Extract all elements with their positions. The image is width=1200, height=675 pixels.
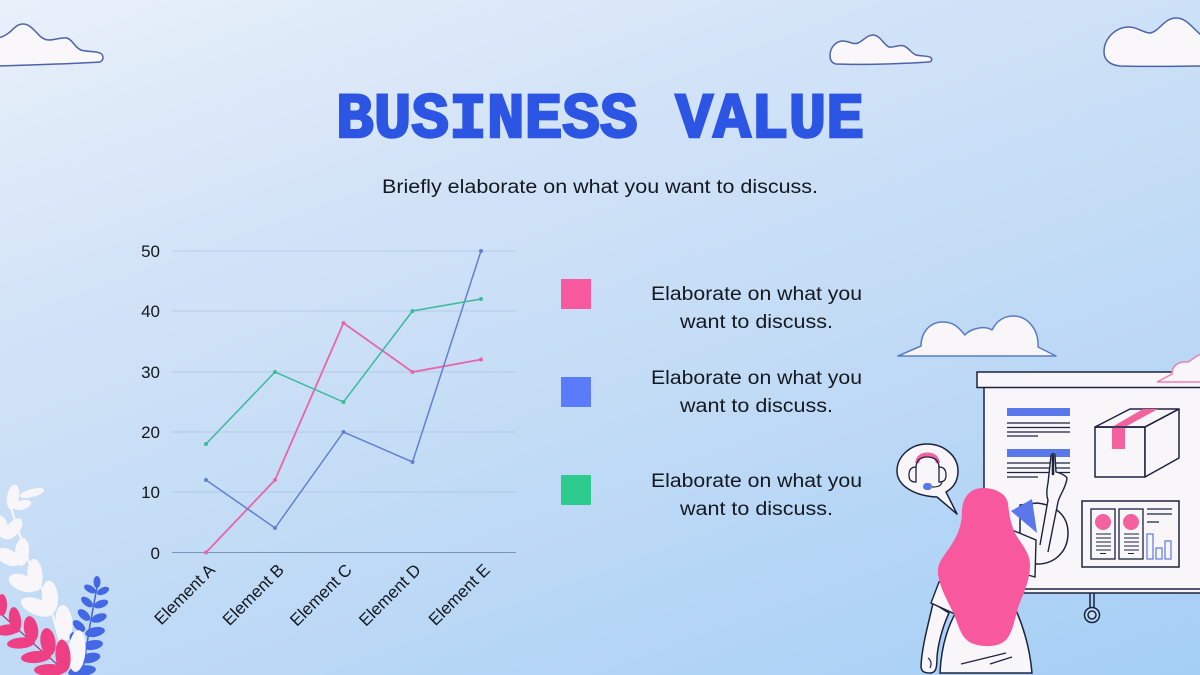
headset microphone [932,482,942,487]
y axis labels: 20 [141,423,160,442]
headset band [917,454,938,463]
presentation board [977,372,1200,622]
raised arm and pointing hand [1040,454,1067,552]
x axis labels: Element B [219,560,288,629]
cloud: pink right [1157,353,1200,382]
white branch [0,484,74,672]
speech bubble outline [897,444,958,514]
y axis labels [141,242,160,563]
legend item: pink: Elaborate on what you [651,284,862,305]
series: blue [204,249,483,530]
y axis labels: 10 [141,483,160,502]
speech bubble with headset icon [897,444,958,514]
board stand knob [1084,593,1100,622]
y axis labels: 40 [141,302,160,321]
blue branch [67,576,110,675]
triangle pennant [1011,499,1037,533]
legend item: green: want to discuss. [679,499,833,520]
x axis labels: Element E [425,560,494,629]
subtitle: Briefly elaborate on what you want to discuss. [382,177,818,198]
upper sleeve [1010,530,1036,577]
series: green [204,297,483,446]
long pink hair [938,488,1030,646]
y axis labels: 50 [141,242,160,261]
dashboard panel [1082,501,1179,567]
foliage: bottom left leaves [0,484,110,675]
dress [940,590,1032,673]
legend item: green [561,471,862,520]
series: pink [204,321,483,554]
pink branch [0,594,72,675]
legend item: pink: want to discuss. [679,312,833,333]
legend item: green: Elaborate on what you [651,471,862,492]
y axis labels: 0 [151,544,160,563]
legend item: blue: Elaborate on what you [651,368,862,389]
presenter figure [921,454,1068,673]
white foreground leaf [67,629,87,673]
line chart [141,242,516,630]
cloud: top right [1104,18,1200,66]
cloud: top middle [830,35,932,64]
legend item: pink [561,279,862,333]
lowered arm [921,603,949,673]
board body [984,387,1200,593]
pointing finger [1052,456,1054,474]
headset ear cups [909,467,946,482]
legend item: blue: want to discuss. [679,396,833,417]
title: BUSINESS VALUE [336,85,864,157]
chart gridlines [172,251,516,552]
board top bar [977,372,1200,388]
text block one [1007,408,1070,436]
legend item: blue [561,368,862,417]
sleeve circle behind the arm [1020,503,1068,564]
y axis labels: 30 [141,363,160,382]
x axis labels: Element A [151,560,219,629]
short sleeve [931,582,965,614]
cloud: behind presentation board [898,316,1056,356]
x axis labels [151,560,494,630]
text block two [1007,449,1070,477]
x axis labels: Element C [286,560,356,630]
cloud: top left [0,24,103,66]
dress creases [928,653,1012,668]
x axis labels: Element D [355,560,425,630]
icon: parcel box [1095,409,1179,477]
